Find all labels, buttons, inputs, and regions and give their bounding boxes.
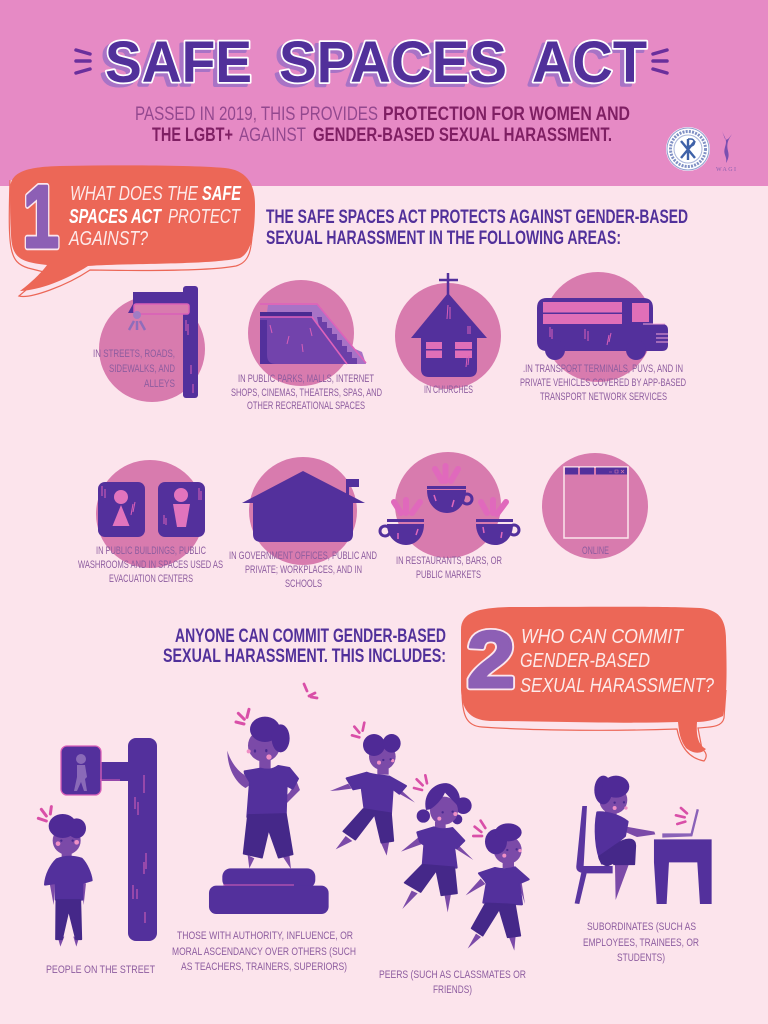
subtitle: GENDER-BASED SEXUAL HARASSMENT.	[313, 125, 612, 146]
subtitle: PASSED IN 2019, THIS PROVIDES	[135, 104, 378, 125]
question 2: SEXUAL HARASSMENT?	[520, 675, 715, 697]
area: online	[542, 453, 648, 559]
subtitle	[135, 104, 630, 146]
area: government offices and schools	[229, 457, 377, 590]
heading: areas	[266, 207, 688, 249]
area: public parks and malls	[231, 280, 382, 412]
caption: SIDEWALKS, AND	[109, 363, 175, 375]
caption: subordinates: STUDENTS)	[617, 952, 665, 964]
caption: SHOPS, CINEMAS, THEATERS, SPAS, AND	[231, 387, 382, 399]
caption: peers: FRIENDS)	[433, 984, 472, 996]
caption	[93, 348, 175, 390]
caption: authority: AS TEACHERS, TRAINERS, SUPERIORS)	[181, 961, 347, 973]
title: SPACES	[279, 30, 507, 95]
speech bubble 1	[9, 165, 255, 296]
area: streets	[93, 286, 205, 402]
numeral 2: 2	[467, 615, 515, 704]
question 1: PROTECT	[168, 206, 241, 228]
caption	[396, 555, 502, 581]
group: subordinates	[575, 776, 712, 904]
caption: IN GOVERNMENT OFFICES, PUBLIC AND	[229, 550, 377, 562]
caption: IN RESTAURANTS, BARS, OR	[396, 555, 502, 567]
question 2	[520, 626, 715, 697]
caption: ALLEYS	[144, 378, 175, 390]
group: people on the street	[38, 738, 157, 947]
caption: subordinates: SUBORDINATES (SUCH AS	[587, 921, 696, 933]
caption: authority: MORAL ASCENDANCY OVER OTHERS (SUCH	[172, 946, 356, 958]
question 1: SPACES ACT	[69, 206, 162, 228]
subtitle: THE LGBT+	[152, 125, 233, 146]
person 2	[401, 775, 473, 912]
caption	[229, 550, 377, 590]
area: public buildings and washrooms	[78, 460, 223, 585]
heading: who	[163, 626, 446, 667]
person 1	[330, 723, 415, 856]
caption: .IN TRANSPORT TERMINALS, PUVS, AND IN	[523, 363, 683, 375]
question 1: WHAT DOES THE	[70, 183, 199, 205]
subtitle: PROTECTION FOR WOMEN AND	[383, 104, 630, 125]
question 1: AGAINST?	[68, 228, 149, 250]
question 2: WHO CAN COMMIT	[521, 626, 685, 648]
caption: subordinates: EMPLOYEES, TRAINEES, OR	[583, 937, 699, 949]
caption: IN PUBLIC PARKS, MALLS, INTERNET	[238, 373, 374, 385]
person at desk	[594, 776, 655, 900]
logo: WAGI: WAGI	[716, 167, 736, 173]
desk	[654, 839, 712, 904]
title: SAFE	[105, 30, 252, 95]
caption	[78, 545, 223, 585]
header band	[0, 0, 768, 186]
subtitle: AGAINST	[239, 125, 306, 146]
person 3	[466, 821, 529, 951]
caption: EVACUATION CENTERS	[109, 573, 193, 585]
chair	[575, 806, 613, 904]
numeral 1: 1	[23, 167, 59, 266]
caption: authority: THOSE WITH AUTHORITY, INFLUENCE, OR	[177, 930, 353, 942]
spark	[304, 684, 317, 698]
speech bubble 2	[461, 607, 727, 761]
heading: who: ANYONE CAN COMMIT GENDER-BASED	[175, 626, 446, 647]
caption: PRIVATE VEHICLES COVERED BY APP-BASED	[520, 377, 686, 389]
caption: PUBLIC MARKETS	[416, 569, 481, 581]
caption: WASHROOMS AND IN SPACES USED AS	[78, 559, 223, 571]
caption: subordinates	[583, 921, 699, 964]
caption	[520, 363, 686, 403]
caption: IN CHURCHES	[424, 384, 473, 396]
person	[38, 807, 92, 947]
question 2: GENDER-BASED	[520, 650, 650, 672]
logo: WAGI	[716, 131, 736, 173]
area: restaurants	[380, 452, 519, 581]
caption	[231, 373, 382, 412]
caption: SCHOOLS	[285, 578, 322, 590]
caption: people on the street: PEOPLE ON THE STREET	[46, 964, 155, 976]
title: SAFE	[101, 33, 248, 98]
area: churches	[395, 273, 501, 396]
caption: OTHER RECREATIONAL SPACES	[247, 400, 365, 412]
numeral 1: 1	[23, 167, 59, 266]
caption: IN PUBLIC BUILDINGS, PUBLIC	[96, 545, 206, 557]
logo: college seal	[666, 127, 710, 171]
group: peers	[330, 723, 529, 951]
question 1: SAFE	[202, 183, 241, 205]
title: ACT	[532, 30, 647, 95]
caption: authority	[172, 930, 356, 973]
title	[76, 30, 667, 98]
caption: TRANSPORT NETWORK SERVICES	[540, 391, 667, 403]
question 1	[68, 183, 241, 250]
caption: PRIVATE; WORKPLACES, AND IN	[245, 564, 362, 576]
title: SPACES	[275, 33, 503, 98]
area: transport	[520, 272, 686, 403]
numeral 2: 2	[467, 615, 515, 704]
heading: areas: SEXUAL HARASSMENT IN THE FOLLOWING AREAS:	[266, 228, 621, 249]
laptop	[662, 809, 699, 838]
caption: ONLINE	[582, 545, 609, 557]
title: ACT	[528, 33, 643, 98]
traffic light	[61, 738, 157, 941]
heading: who: SEXUAL HARASSMENT. THIS INCLUDES:	[163, 646, 446, 667]
caption: peers: PEERS (SUCH AS CLASSMATES OR	[379, 969, 526, 981]
group: those with authority	[209, 684, 329, 914]
caption: IN STREETS, ROADS,	[93, 348, 175, 360]
caption: peers	[379, 969, 526, 996]
